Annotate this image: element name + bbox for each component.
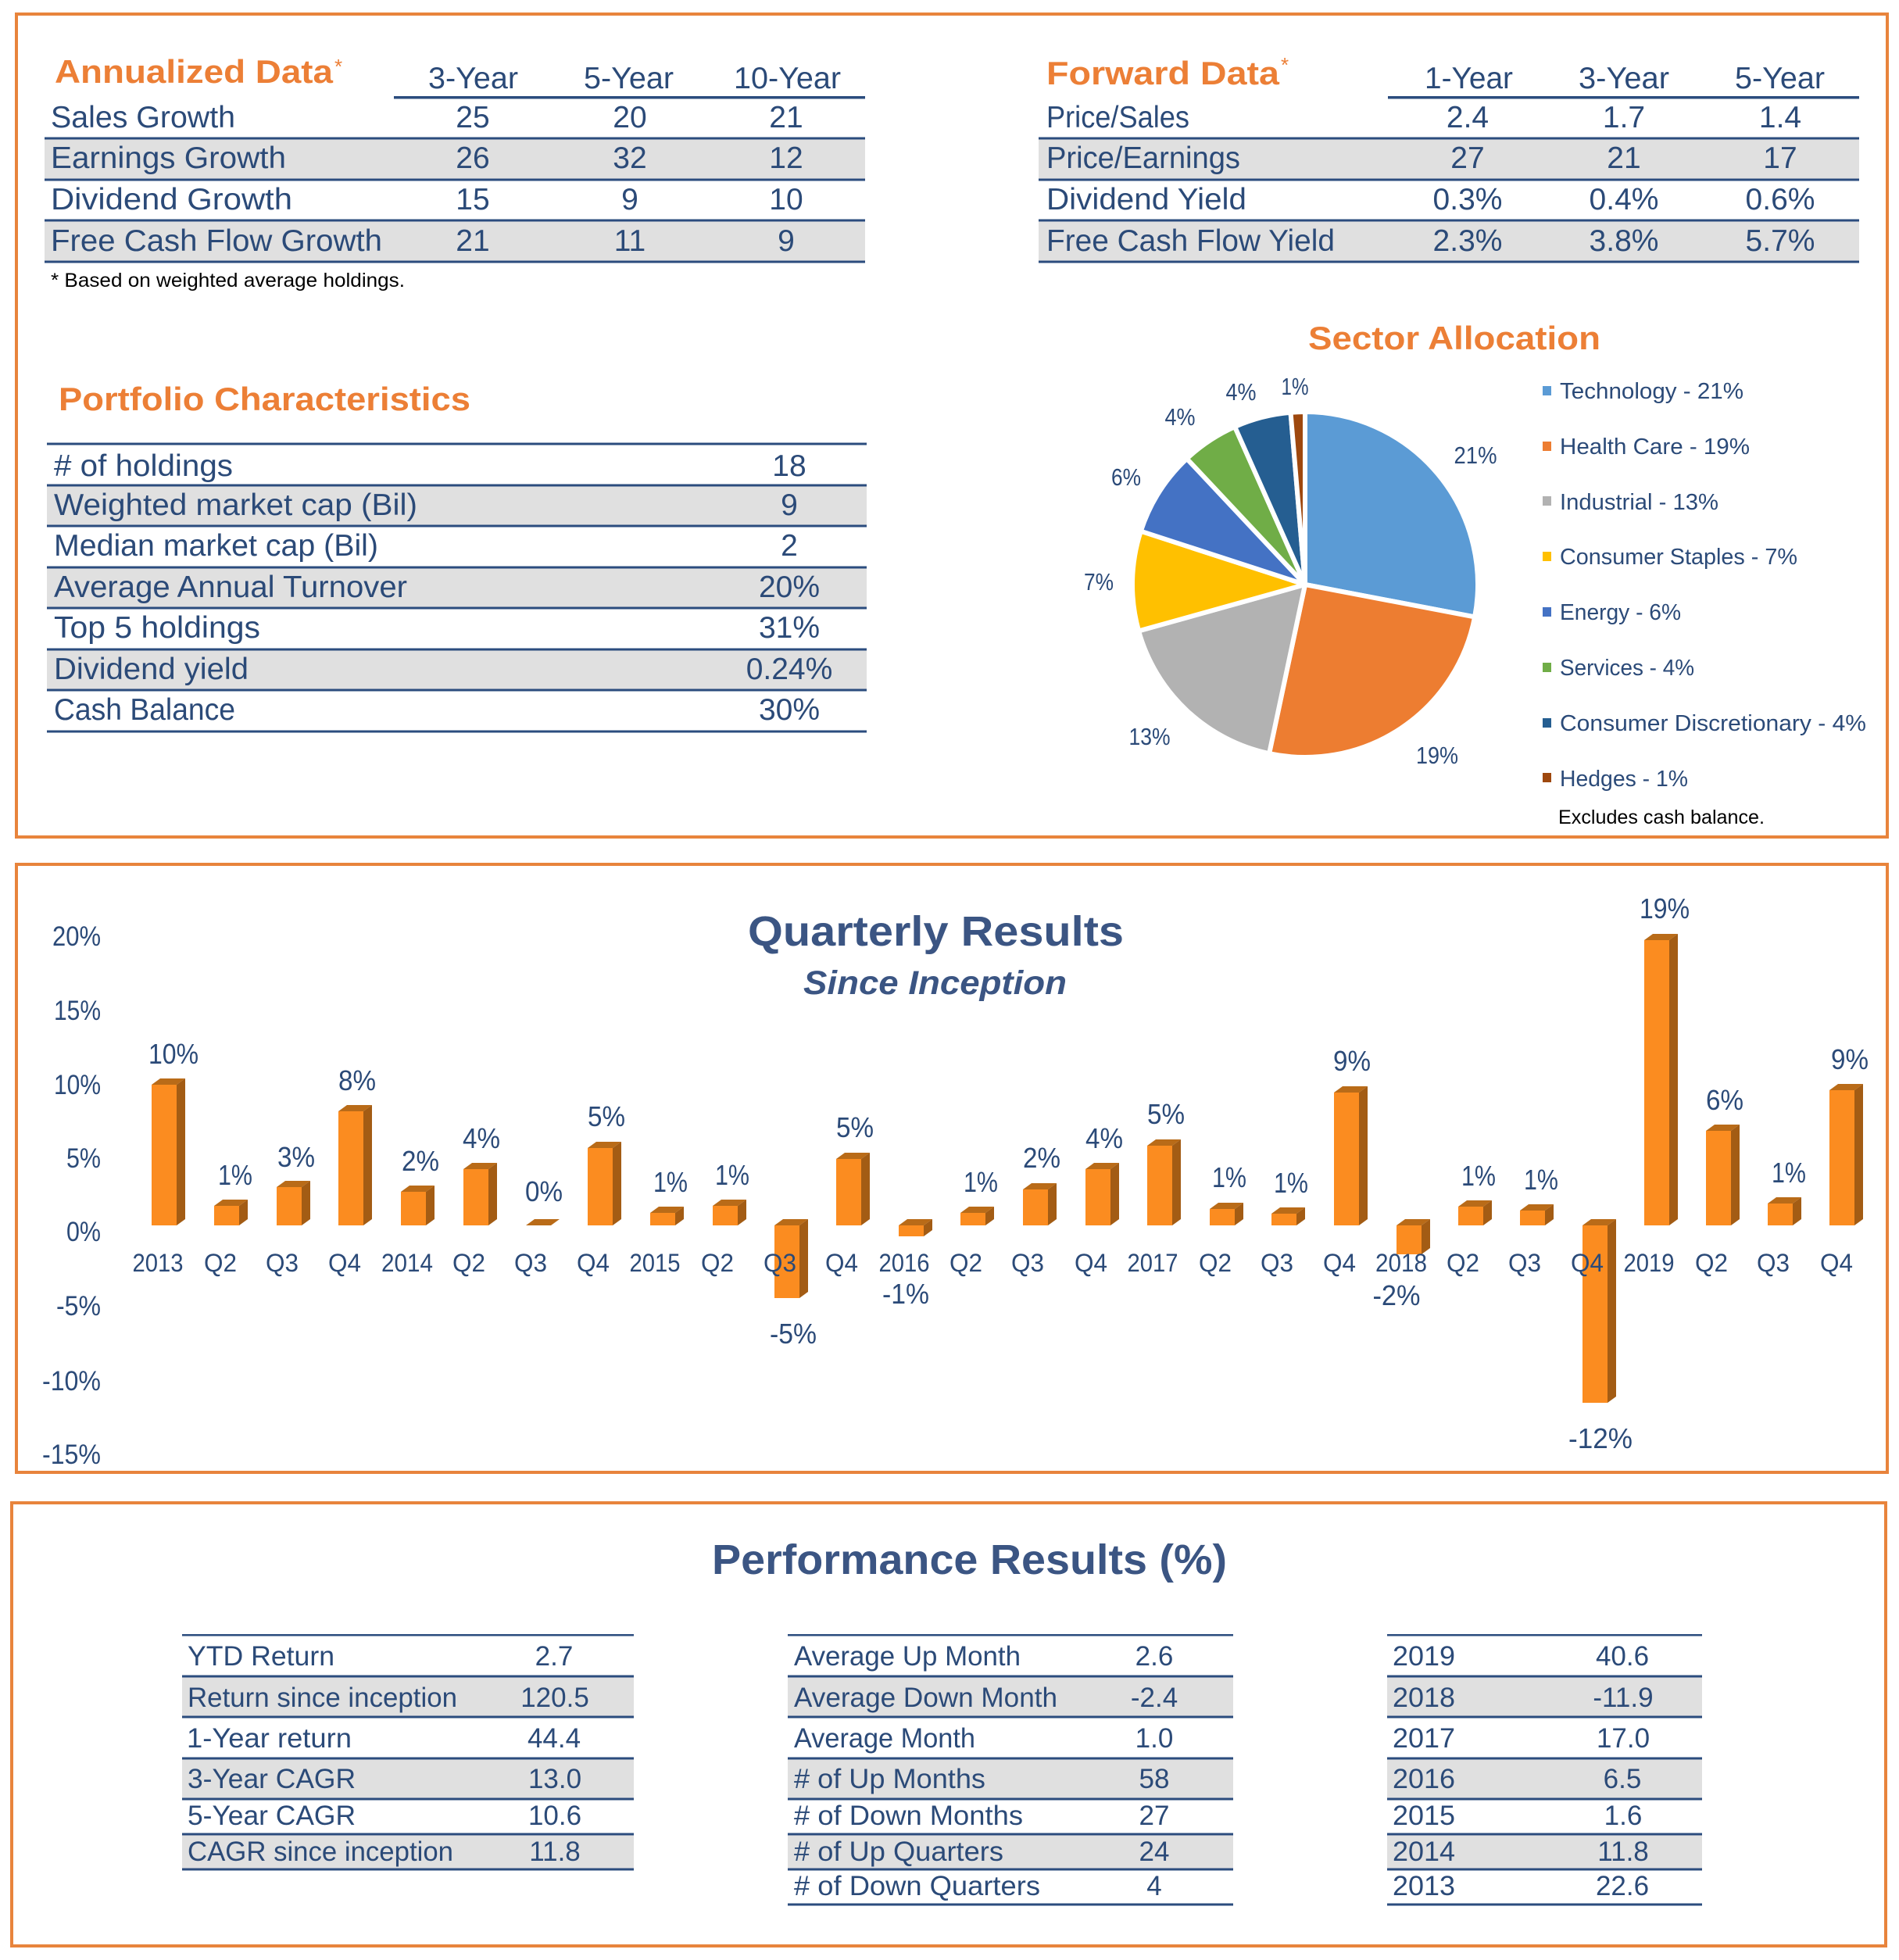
pie chart: sector allocation [1084, 373, 1497, 769]
table: annualized data [45, 62, 865, 263]
x axis labels: Q4 [825, 1249, 858, 1277]
table: forward data: 17 [1763, 141, 1797, 175]
table: monthly and quarterly stats: 58 [1139, 1764, 1169, 1794]
bar: 2015 Q1 [650, 1207, 684, 1225]
bar: 2018 Q1 negative [1397, 1219, 1430, 1254]
heading: portfolio characteristics: Portfolio Characteristics [59, 381, 470, 417]
legend: sector allocation: Energy - 6% [1560, 600, 1681, 625]
bar value labels: -5% [770, 1318, 817, 1350]
table: portfolio characteristics [47, 442, 867, 733]
x axis labels: Q3 [266, 1249, 299, 1277]
table: annualized data: 15 [456, 183, 490, 216]
x axis labels: Q2 [1447, 1249, 1479, 1277]
table: annualized data: 10 [769, 183, 803, 216]
bar value labels: -1% [882, 1278, 929, 1310]
table: calendar year returns: 2018 [1393, 1683, 1455, 1713]
table: annualized data: 26 [456, 141, 490, 175]
table: monthly and quarterly stats: 2.6 [1135, 1641, 1173, 1672]
table: forward data: 1-Year [1425, 62, 1513, 95]
table: portfolio characteristics: Weighted market cap (Bil) [54, 488, 417, 522]
bar: 2015 Q3 negative [774, 1219, 808, 1298]
bar value labels: 5% [588, 1100, 625, 1132]
bar: 2013 Q3 [277, 1181, 310, 1225]
pie chart: sector allocation: 6% [1111, 463, 1141, 491]
table: calendar year returns: 2017 [1393, 1723, 1455, 1754]
table: annualized data: 3-Year [428, 62, 518, 95]
table: portfolio characteristics: 0.24% [746, 653, 832, 686]
bar value labels: 1% [1461, 1160, 1496, 1192]
bar value labels: 1% [1274, 1167, 1308, 1199]
bar value labels: 1% [1524, 1164, 1558, 1196]
bar: 2019 Q3 [1768, 1197, 1801, 1225]
bar value labels: 5% [836, 1111, 874, 1143]
x axis labels [133, 1249, 1853, 1277]
legend: sector allocation [1543, 379, 1866, 792]
x axis labels: Q4 [577, 1249, 610, 1277]
bar: 2018 Q2 [1458, 1200, 1492, 1225]
pie chart: sector allocation: 21% [1454, 442, 1497, 469]
x axis labels: Q3 [1261, 1249, 1293, 1277]
x axis labels: Q4 [1571, 1249, 1604, 1277]
x axis labels: 2016 [878, 1249, 930, 1277]
table: forward data: Price/Sales [1046, 101, 1189, 134]
table: annualized data: Free Cash Flow Growth [51, 224, 382, 258]
bar: 2018 Q4 negative [1582, 1219, 1616, 1403]
x axis labels: 2017 [1127, 1249, 1178, 1277]
title: performance results: Performance Results (%) [712, 1536, 1227, 1583]
y axis labels: -15% [42, 1440, 101, 1470]
bar value labels: 10% [148, 1038, 198, 1070]
table: forward data: 1.4 [1759, 101, 1801, 134]
table: calendar year returns: 2015 [1393, 1801, 1455, 1831]
table: portfolio characteristics: Cash Balance [54, 693, 235, 727]
table: annualized data: 21 [769, 101, 803, 134]
bar: 2014 Q4 [588, 1142, 621, 1225]
table: forward data: 21 [1607, 141, 1641, 175]
table: monthly and quarterly stats: Average Up Month [794, 1641, 1021, 1672]
panel frame: portfolio data [16, 14, 1887, 837]
table: calendar year returns: 2016 [1393, 1764, 1455, 1794]
table: calendar year returns: 1.6 [1604, 1801, 1642, 1831]
panel: portfolio data [16, 14, 1887, 837]
table: forward data: 5.7% [1746, 224, 1815, 258]
bar value labels: 3% [277, 1141, 315, 1173]
bar: 2017 Q1 [1147, 1139, 1181, 1225]
bar value labels: 2% [402, 1145, 439, 1177]
bar: 2019 Q2 [1706, 1125, 1740, 1225]
bar: 2013 Q4 [338, 1105, 372, 1225]
heading: forward data: Forward Data [1046, 55, 1280, 91]
table: annualized data: 9 [621, 183, 638, 216]
bar: 2014 Q2 [463, 1163, 497, 1225]
table: annualized data: 12 [769, 141, 803, 175]
x axis labels: Q3 [1757, 1249, 1790, 1277]
table: portfolio characteristics: 18 [772, 449, 806, 483]
pie chart: sector allocation: 13% [1128, 723, 1171, 750]
bar chart: quarterly returns [152, 934, 1863, 1403]
y axis labels: 5% [66, 1143, 101, 1174]
table: annualized data: Earnings Growth [51, 141, 286, 175]
table: returns summary: 2.7 [535, 1641, 573, 1672]
table: calendar year returns: 17.0 [1597, 1723, 1650, 1754]
table: returns summary: 5-Year CAGR [188, 1801, 356, 1831]
bar value labels: 1% [1772, 1157, 1806, 1189]
table: calendar year returns: -11.9 [1593, 1683, 1654, 1713]
bar: 2014 Q3 [526, 1219, 560, 1225]
x axis labels: Q3 [514, 1249, 547, 1277]
table: annualized data: 9 [778, 224, 795, 258]
table: calendar year returns: 2019 [1393, 1641, 1455, 1672]
legend: sector allocation: Consumer Staples - 7% [1560, 545, 1797, 570]
bar value labels: -12% [1568, 1422, 1633, 1454]
heading: forward data: * [1281, 53, 1289, 77]
bar value labels: 1% [653, 1166, 688, 1198]
x axis labels: 2019 [1624, 1249, 1674, 1277]
panel frame: performance results [12, 1503, 1886, 1946]
table: forward data: 0.3% [1433, 183, 1502, 216]
table: forward data: Price/Earnings [1046, 141, 1240, 175]
y axis labels: -5% [56, 1291, 101, 1322]
table: annualized data: Sales Growth [51, 101, 235, 134]
table: returns summary: 44.4 [528, 1723, 581, 1754]
table: returns summary: 13.0 [528, 1764, 581, 1794]
x axis labels: Q4 [1323, 1249, 1356, 1277]
table: monthly and quarterly stats: # of Up Months [794, 1764, 985, 1794]
x axis labels: Q2 [452, 1249, 485, 1277]
y axis labels: 15% [54, 996, 101, 1026]
bar value labels [148, 892, 1869, 1454]
subtitle: since inception: Since Inception [803, 964, 1067, 1002]
legend: sector allocation: Health Care - 19% [1560, 435, 1750, 460]
bar: 2019 Q4 [1829, 1084, 1863, 1225]
bar: 2015 Q2 [713, 1200, 746, 1225]
table: monthly and quarterly stats [788, 1634, 1233, 1905]
table: annualized data: 10-Year [734, 62, 841, 95]
bar value labels: -2% [1372, 1279, 1421, 1311]
bar: 2016 Q1 negative [899, 1219, 932, 1236]
bar value labels: 1% [1212, 1161, 1246, 1193]
panel: quarterly results [16, 864, 1887, 1472]
bar value labels: 1% [218, 1159, 252, 1191]
x axis labels: 2015 [630, 1249, 680, 1277]
table: portfolio characteristics: 20% [759, 570, 820, 604]
legend: sector allocation: Technology - 21% [1560, 379, 1743, 404]
table: forward data: 0.6% [1746, 183, 1815, 216]
bar value labels: 8% [338, 1064, 376, 1096]
pie chart: sector allocation: 4% [1164, 403, 1196, 431]
bar value labels: 19% [1640, 892, 1690, 925]
table: forward data: 5-Year [1735, 62, 1825, 95]
bar value labels: 5% [1147, 1098, 1185, 1130]
bar value labels: 9% [1333, 1045, 1371, 1077]
bar: 2015 Q4 [836, 1153, 870, 1225]
table: monthly and quarterly stats: 1.0 [1135, 1723, 1173, 1754]
table: returns summary: YTD Return [188, 1641, 334, 1672]
bar: 2013 Q1 [152, 1078, 185, 1225]
table: portfolio characteristics: 2 [781, 529, 798, 563]
table: portfolio characteristics: 9 [781, 488, 798, 522]
table: returns summary: 1-Year return [187, 1723, 352, 1754]
x axis labels: Q4 [328, 1249, 361, 1277]
table: annualized data: 5-Year [584, 62, 674, 95]
table: monthly and quarterly stats: # of Up Quarters [794, 1837, 1003, 1867]
table: annualized data: 20 [613, 101, 647, 134]
bar value labels: 1% [715, 1159, 749, 1191]
table: portfolio characteristics: Dividend yield [54, 653, 249, 686]
table: calendar year returns: 22.6 [1596, 1871, 1649, 1901]
table: returns summary: 120.5 [520, 1683, 589, 1713]
bar: 2017 Q2 [1210, 1203, 1243, 1225]
table: forward data [1039, 62, 1859, 263]
note: excludes cash balance: Excludes cash balance. [1558, 807, 1765, 828]
table: calendar year returns: 2013 [1393, 1871, 1455, 1901]
legend: sector allocation: Industrial - 13% [1560, 490, 1718, 515]
pie chart: sector allocation: 19% [1416, 742, 1458, 769]
bar: 2016 Q4 [1085, 1163, 1119, 1225]
bar: 2017 Q4 [1334, 1086, 1368, 1225]
table: calendar year returns [1387, 1634, 1702, 1905]
table: forward data: 3.8% [1590, 224, 1658, 258]
x axis labels: Q2 [1199, 1249, 1232, 1277]
bar value labels: 9% [1831, 1043, 1869, 1075]
x axis labels: Q2 [701, 1249, 734, 1277]
heading: annualized data: Annualized Data [55, 53, 334, 90]
legend: sector allocation: Services - 4% [1560, 656, 1694, 681]
bar value labels: 2% [1023, 1142, 1060, 1174]
footnote: weighted average holdings: * Based on weighted average holdings. [51, 270, 405, 291]
table: forward data: 2.4 [1447, 101, 1489, 134]
table: monthly and quarterly stats: 4 [1146, 1871, 1162, 1901]
x axis labels: Q2 [204, 1249, 237, 1277]
pie chart: sector allocation: 1% [1282, 373, 1308, 400]
table: monthly and quarterly stats: 24 [1139, 1837, 1169, 1867]
panel frame: quarterly results [16, 864, 1887, 1472]
y axis labels: 20% [52, 921, 101, 952]
bar: 2018 Q3 [1520, 1204, 1554, 1225]
x axis labels: 2018 [1375, 1249, 1427, 1277]
table: annualized data: 21 [456, 224, 490, 258]
x axis labels: Q3 [1508, 1249, 1541, 1277]
table: returns summary: 10.6 [528, 1801, 581, 1831]
table: forward data: Free Cash Flow Yield [1046, 224, 1335, 258]
x axis labels: Q4 [1820, 1249, 1853, 1277]
table: portfolio characteristics: # of holdings [54, 449, 233, 483]
bar: 2016 Q3 [1023, 1183, 1057, 1225]
x axis labels: 2014 [381, 1249, 433, 1277]
table: monthly and quarterly stats: # of Down Quarters [794, 1871, 1040, 1901]
table: monthly and quarterly stats: # of Down Months [794, 1801, 1023, 1831]
table: portfolio characteristics: Top 5 holdings [54, 611, 260, 645]
y axis labels: 0% [66, 1217, 101, 1247]
table: forward data: 3-Year [1579, 62, 1669, 95]
panel: performance results [12, 1503, 1886, 1946]
bar value labels: 6% [1706, 1084, 1743, 1116]
pie chart: sector allocation: 4% [1225, 378, 1257, 406]
table: returns summary: 3-Year CAGR [188, 1764, 356, 1794]
legend: sector allocation: Hedges - 1% [1560, 767, 1688, 792]
table: portfolio characteristics: 31% [759, 611, 820, 645]
bar: 2013 Q2 [214, 1200, 248, 1225]
y axis labels [42, 921, 101, 1470]
table: forward data: 0.4% [1590, 183, 1658, 216]
title: quarterly results: Quarterly Results [748, 908, 1124, 955]
table: returns summary: 11.8 [529, 1837, 581, 1867]
x axis labels: Q3 [764, 1249, 796, 1277]
table: calendar year returns: 6.5 [1604, 1764, 1641, 1794]
table: forward data: 2.3% [1433, 224, 1502, 258]
table: portfolio characteristics: Median market cap (Bil) [54, 529, 378, 563]
table: returns summary: CAGR since inception [188, 1837, 453, 1867]
bar value labels: 0% [525, 1175, 563, 1207]
table: returns summary [182, 1634, 634, 1871]
bar: 2016 Q2 [960, 1207, 994, 1225]
pie chart: sector allocation: 7% [1084, 568, 1114, 596]
table: monthly and quarterly stats: Average Month [794, 1723, 975, 1754]
bar: 2014 Q1 [401, 1186, 435, 1225]
table: forward data: 27 [1450, 141, 1485, 175]
heading: sector allocation: Sector Allocation [1308, 320, 1600, 356]
bar: 2019 Q1 [1644, 934, 1678, 1225]
y axis labels: -10% [42, 1366, 101, 1397]
x axis labels: Q2 [950, 1249, 982, 1277]
bar value labels: 4% [463, 1122, 500, 1154]
x axis labels: Q2 [1695, 1249, 1728, 1277]
y axis labels: 10% [54, 1070, 101, 1100]
x axis labels: Q3 [1011, 1249, 1044, 1277]
table: annualized data: Dividend Growth [51, 183, 292, 216]
table: monthly and quarterly stats: 27 [1139, 1801, 1169, 1831]
legend: sector allocation: Consumer Discretionary - 4% [1560, 711, 1866, 736]
table: monthly and quarterly stats: Average Down Month [794, 1683, 1057, 1713]
bar: 2017 Q3 [1271, 1207, 1305, 1225]
table: returns summary: Return since inception [188, 1683, 457, 1713]
x axis labels: 2013 [133, 1249, 183, 1277]
bar value labels: 1% [964, 1166, 998, 1198]
table: calendar year returns: 40.6 [1596, 1641, 1649, 1672]
table: monthly and quarterly stats: -2.4 [1131, 1683, 1178, 1713]
table: forward data: Dividend Yield [1046, 183, 1246, 216]
x axis labels: Q4 [1075, 1249, 1107, 1277]
bar value labels: 4% [1085, 1122, 1123, 1154]
table: annualized data: 11 [614, 224, 646, 258]
table: portfolio characteristics: 30% [759, 693, 820, 727]
table: forward data: 1.7 [1603, 101, 1645, 134]
table: portfolio characteristics: Average Annual Turnover [54, 570, 407, 604]
table: annualized data: 32 [613, 141, 647, 175]
table: annualized data: 25 [456, 101, 490, 134]
table: calendar year returns: 11.8 [1597, 1837, 1649, 1867]
heading: annualized data: * [334, 55, 342, 78]
table: calendar year returns: 2014 [1393, 1837, 1455, 1867]
